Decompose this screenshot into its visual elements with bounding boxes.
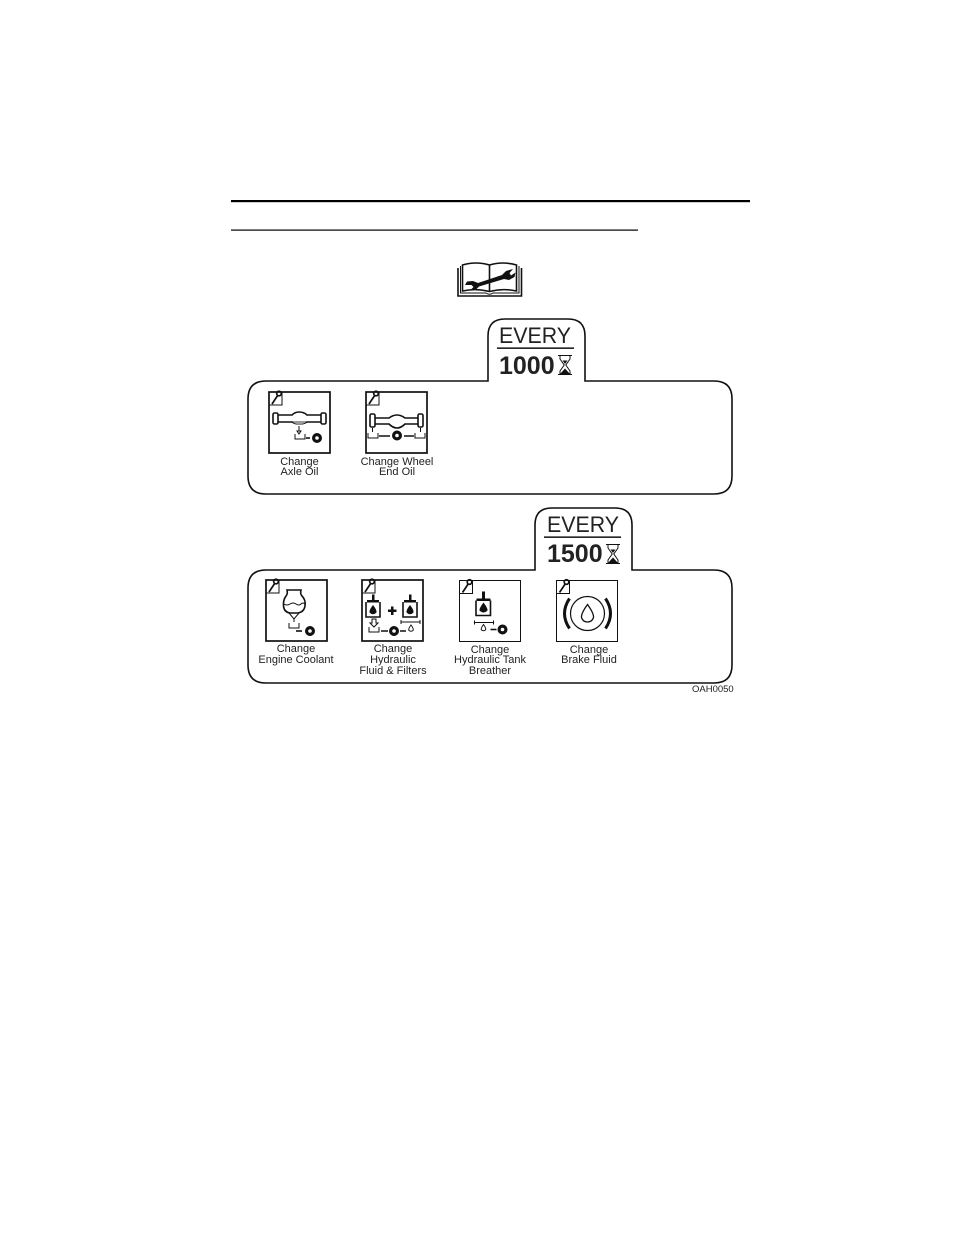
icon: change wheel end oil xyxy=(366,391,427,453)
icon: change axle oil xyxy=(269,391,330,453)
icon: hourglass xyxy=(558,356,572,374)
label: change engine coolant: Change xyxy=(277,643,315,655)
icon: change hydraulic tank breather xyxy=(460,580,520,642)
label: change wheel end oil: End Oil xyxy=(379,466,415,478)
icon: service manual book with wrench xyxy=(458,263,522,296)
label: change wheel end oil: Change Wheel xyxy=(361,456,433,468)
label: change hydraulic tank breather: Breather xyxy=(469,665,511,677)
heading: every: EVERY xyxy=(547,512,619,537)
icon: hourglass xyxy=(606,544,620,564)
panel outline with tab xyxy=(248,319,732,494)
label: change axle oil: Axle Oil xyxy=(281,466,318,478)
icon: change hydraulic fluid and filters xyxy=(362,579,423,641)
label: change hydraulic fluid and filters: Change xyxy=(374,643,412,655)
label: change hydraulic tank breather: Hydraulic Tank xyxy=(454,654,526,666)
heading: 1500 hours: 1500 xyxy=(547,540,603,568)
label: change hydraulic tank breather: Change xyxy=(471,644,509,656)
heading: 1000 hours: 1000 xyxy=(499,352,555,380)
heading: every: EVERY xyxy=(499,323,571,348)
icon: change brake fluid xyxy=(556,580,618,642)
figure code: OAH0050 xyxy=(692,684,734,695)
label: change hydraulic fluid and filters: Hydraulic xyxy=(370,654,416,666)
panel: every 1500 hours xyxy=(248,508,732,683)
label: change hydraulic fluid and filters: Fluid & Filters xyxy=(359,665,427,677)
label: change engine coolant: Engine Coolant xyxy=(258,654,334,666)
panel: every 1000 hours xyxy=(248,319,732,494)
icon: change engine coolant xyxy=(266,579,327,641)
label: change axle oil: Change xyxy=(280,456,319,468)
label: change brake fluid: Change xyxy=(570,644,608,656)
panel outline with tab xyxy=(248,508,732,683)
label: change brake fluid: Brake Fluid xyxy=(561,654,617,666)
